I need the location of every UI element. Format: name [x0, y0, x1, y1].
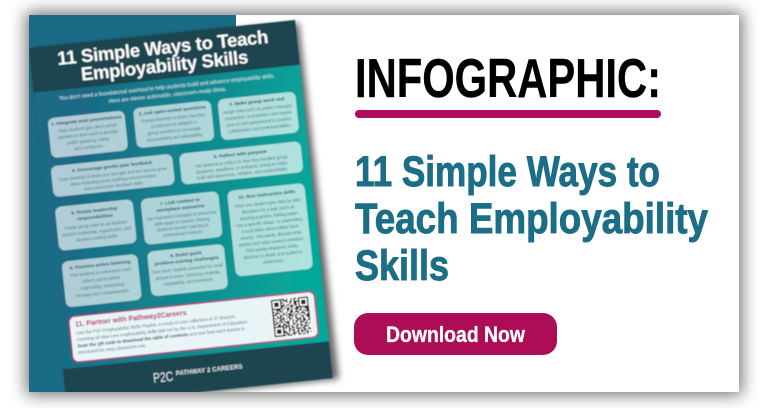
tip 2: contributed or adapted in — [150, 119, 198, 129]
tip 10: a tool) while others follow them — [241, 223, 300, 234]
tip 10: attention to detail, and audience — [243, 249, 303, 260]
tip 7 — [140, 191, 223, 245]
tip 7: workplace scenarios — [155, 203, 205, 214]
tip 1: updates on their work to develop — [57, 129, 119, 140]
tip 3: collaboration and professionalism. — [228, 123, 291, 134]
subtitle: Teach Employability — [355, 196, 708, 243]
tip 7: professional contexts. — [163, 229, 204, 238]
tip 9: Give short, realistic scenarios for small — [152, 262, 223, 275]
tip 10 — [227, 183, 313, 277]
tip 10: exactly. Afterwards, discuss what — [240, 229, 302, 241]
poster footer with logo: PATHWAY 2 CAREERS — [176, 364, 243, 377]
tip 10: directions for a task (such as — [241, 204, 295, 215]
tip 4 — [50, 154, 175, 197]
tip 4: Coax students to share one strength and one area to grow — [59, 166, 168, 182]
poster title band: 11 Simple Ways to Teach — [56, 26, 269, 69]
infographic poster thumbnail — [29, 15, 339, 407]
tip 5 — [179, 141, 303, 185]
subtitle: 11 Simple Ways to — [355, 149, 660, 196]
poster title band — [29, 20, 300, 93]
tip 9: problem-solving challenges — [154, 255, 219, 268]
tip 10: 10. Run instruction drills — [238, 189, 296, 201]
poster intro: Here are eleven actionable, classroom-ready ideas. — [109, 87, 227, 105]
tip 9: groups to solve, fostering creativity, — [155, 269, 221, 281]
tip 7: Use real-world examples to show how — [146, 209, 218, 222]
tip 5: Ask students to reflect on how they handled group — [195, 154, 288, 169]
tip 10: This activity sharpens clarity, — [246, 243, 299, 253]
tip 8: 8. Practice active listening — [69, 259, 131, 271]
download button — [354, 313, 557, 355]
tip 2 — [133, 100, 215, 148]
tip 1 — [47, 110, 128, 158]
tip 5: build self-awareness, initiative, and responsibility. — [197, 166, 288, 181]
tip 10: drawing a picture, folding paper — [240, 210, 299, 221]
tip 11: partner callout: covering all nine core employability skills laid out by the U.S. Department of Education. — [76, 319, 248, 342]
tip 6: responsibilities — [77, 213, 114, 222]
heading: INFOGRAPHIC: INFOGRAPHIC: — [355, 47, 661, 109]
tip 2: accountability and adaptability. — [147, 132, 204, 143]
tip 9: adaptability, and teamwork. — [163, 276, 214, 287]
tip 9: 9. Build quick — [170, 250, 202, 259]
poster intro: You don't need a foundational overhaul to help students build and advance employability skills. — [59, 73, 275, 102]
tip 4: and constructive feedback skills. — [84, 180, 144, 192]
tip 11: partner callout — [68, 291, 319, 363]
tip 2: 2. Ask open-ended questions — [138, 104, 207, 117]
tip 2: Prompt students to share how they — [141, 112, 206, 124]
tip 4: when reviewing peers, building communication — [70, 173, 157, 187]
tip 10: awareness. — [263, 257, 285, 265]
tip 6: decision-making skills. — [76, 233, 118, 243]
poster footer with logo — [62, 340, 334, 392]
poster footer with logo: P2C — [152, 368, 174, 386]
tip 8: responding, sharpening — [80, 281, 125, 291]
subtitle: Skills — [355, 243, 449, 290]
tip 3: Assign roles such as project manager, — [222, 103, 293, 115]
tip 5: 5. Reflect with purpose — [213, 149, 267, 160]
tip 8: Pair students to summarize each — [70, 266, 132, 278]
tip 8 — [62, 254, 142, 308]
tip 1: 1. Integrate mini presentations — [51, 114, 122, 128]
tip 10: Have one student give step-by-step — [234, 197, 301, 209]
tip 1: and confidence. — [74, 143, 104, 151]
tip 6 — [55, 199, 137, 251]
tip 6: Rotate group roles so all students — [65, 219, 127, 231]
tip 3: researcher, or presenter and require — [225, 109, 293, 121]
tip 1: public speaking, clarity, — [67, 136, 110, 146]
subtitle — [355, 149, 708, 290]
tip 6: practice leadership, organization, and — [62, 225, 132, 238]
download button: Download Now — [386, 322, 526, 347]
tip 7: 7. Link content to — [159, 197, 200, 207]
tip 4: 4. Encourage gentle peer feedback — [71, 160, 153, 174]
tip 10: worked and what caused confusion. — [238, 236, 305, 248]
accent rule — [355, 110, 661, 118]
tip 1: Have students give short verbal — [58, 122, 117, 133]
tip 7: skills apply in careers, helping — [154, 216, 211, 227]
tip 5: dynamics, deadlines, or setbacks. Doing so helps — [196, 160, 288, 175]
tip 6: 6. Rotate leadership — [71, 206, 118, 216]
tip 8: focusing and comprehension. — [76, 288, 130, 298]
tip 9 — [147, 244, 228, 297]
tip 3 — [217, 91, 299, 140]
tip 3: peer or self-assessment to practice — [226, 116, 292, 128]
tip 11: partner callout: structured for easy classroom use. — [78, 343, 147, 355]
tip 11: partner callout: 11. Partner with Pathway2Careers — [75, 310, 187, 329]
poster title band: Employability Skills — [80, 46, 249, 85]
tip 8: other's points before — [82, 275, 121, 284]
tip 11: partner callout: Use the P2C Employability Skills Playlist, a ready-to-use collection of 27 lessons — [76, 314, 236, 336]
tip 3: 3. Make group work real — [229, 96, 286, 108]
tip 7: students transfer learning to — [157, 222, 209, 233]
tip 2: group activities to encourage — [148, 125, 202, 136]
tip 11: partner callout: Scan the QR code to download the table of contents and see how each lesson is — [77, 326, 246, 349]
tip 10: into a specific shape, or assembling — [236, 216, 303, 228]
QR code — [270, 295, 313, 339]
